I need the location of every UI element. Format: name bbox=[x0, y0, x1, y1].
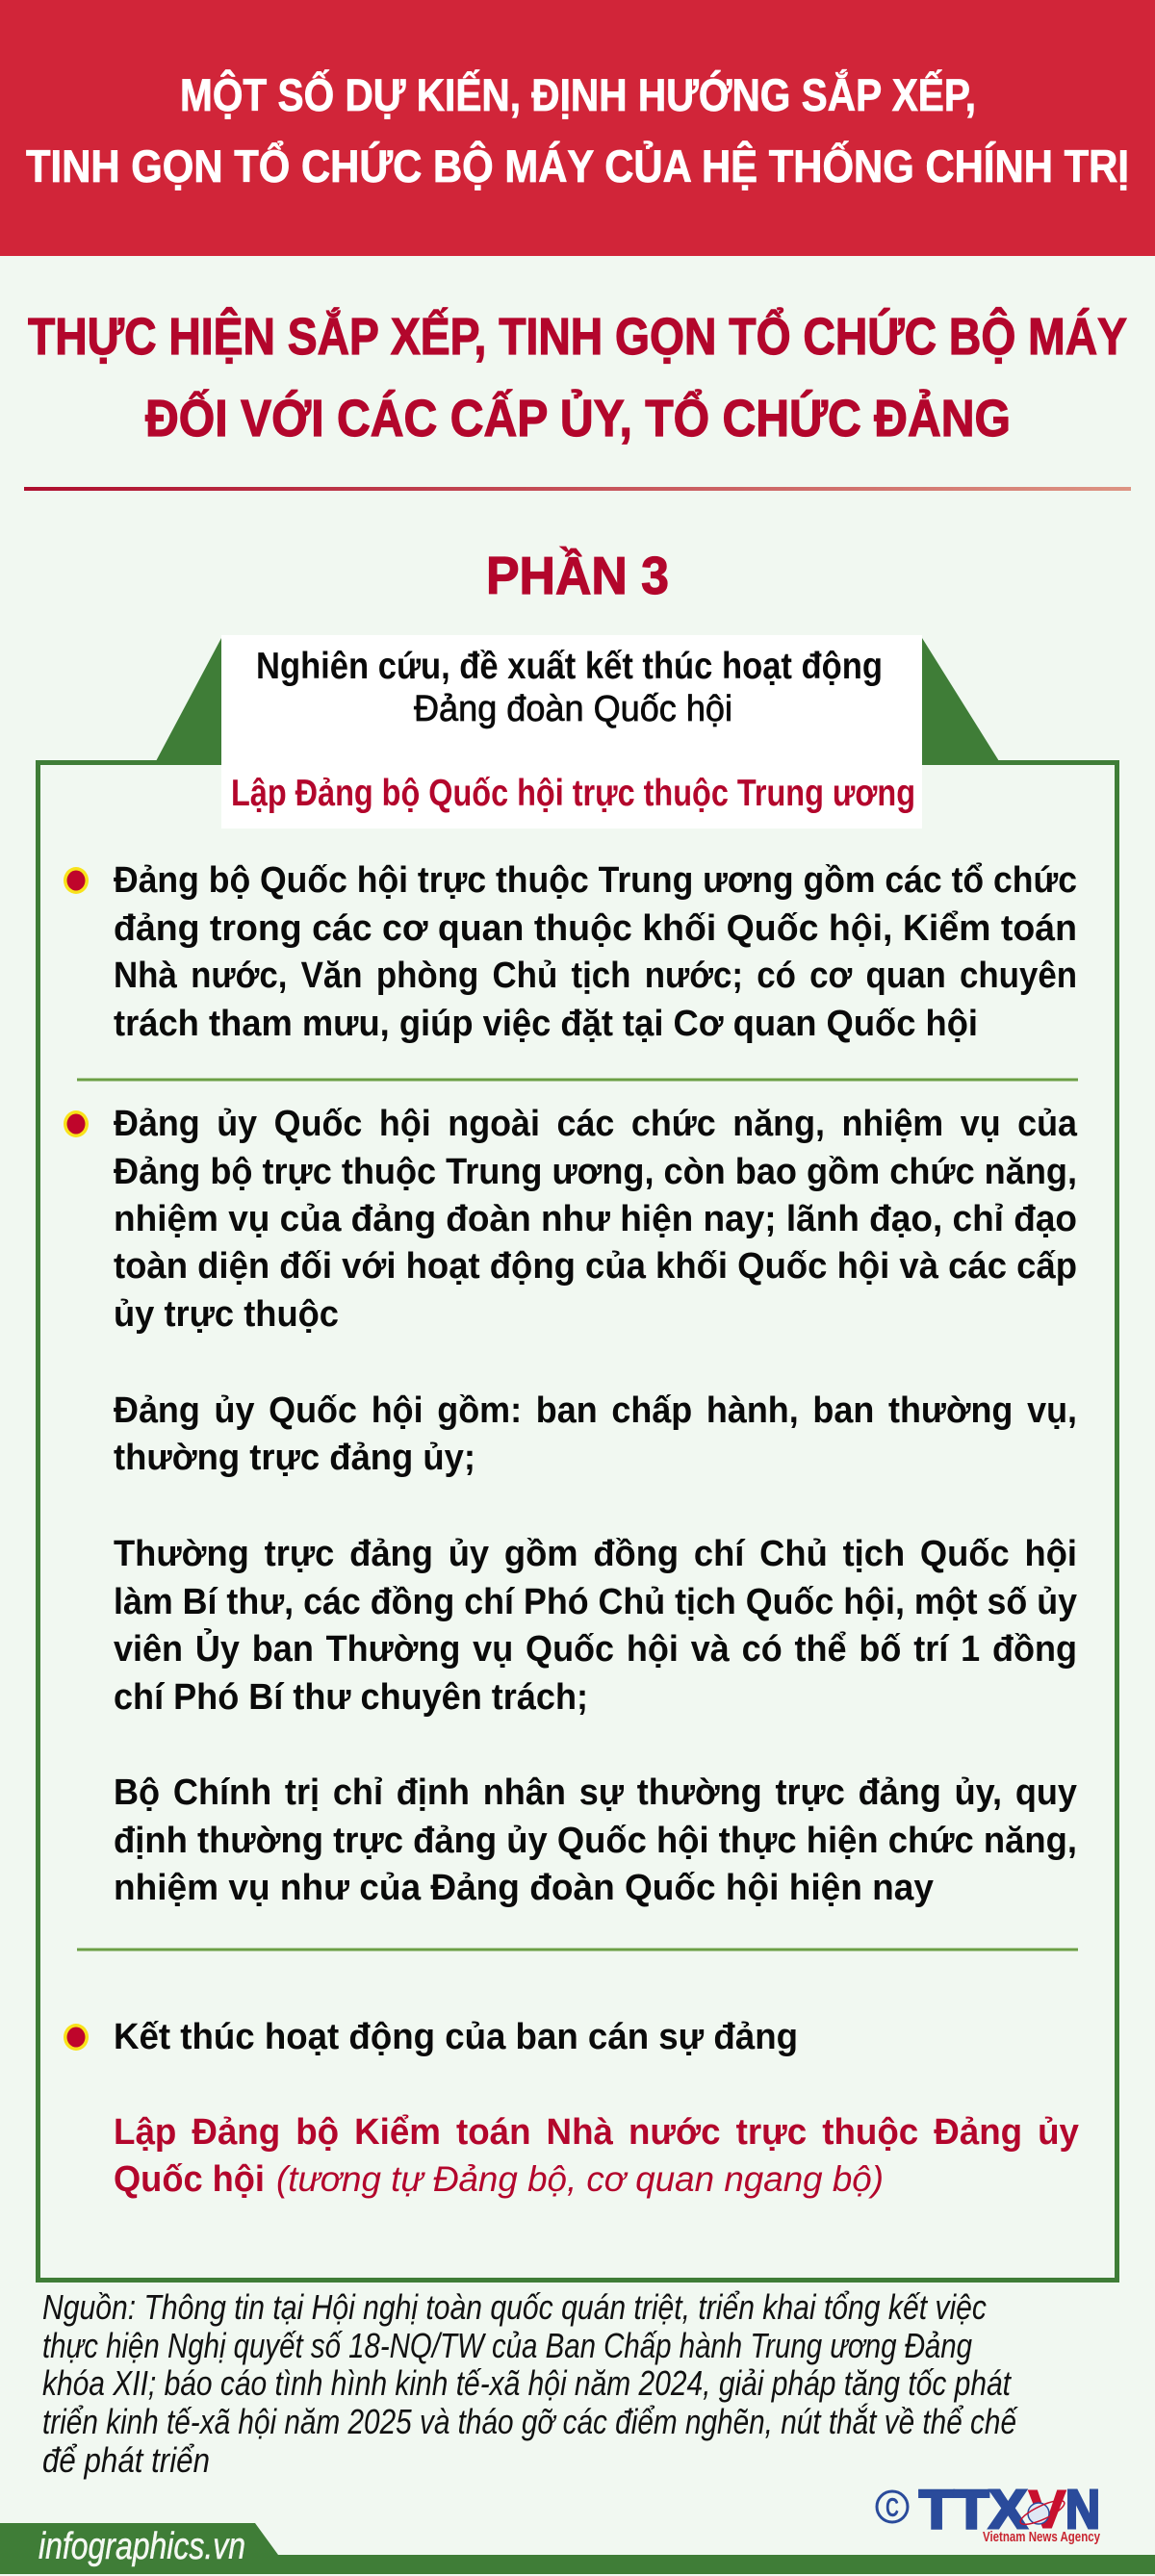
icon: TTXVN logo: C bbox=[886, 2492, 899, 2522]
bullet 3 bbox=[64, 2024, 89, 2051]
right green triangle bbox=[922, 638, 999, 761]
text block: red note bbox=[114, 2112, 1079, 2200]
text block: second item: định thường trực đảng ủy Quốc hội thực hiện chức năng, bbox=[114, 1821, 1077, 1861]
text block: second item: Bộ Chính trị chỉ định nhân sự thường trực đảng ủy, quy bbox=[114, 1773, 1077, 1813]
text block: second item: nhiệm vụ như của Đảng đoàn Quốc hội hiện nay bbox=[114, 1868, 934, 1908]
subtitle heading bbox=[28, 307, 1127, 447]
source note: Nguồn: Thông tin tại Hội nghị toàn quốc quán triệt, triển khai tổng kết việc bbox=[42, 2287, 987, 2327]
text block: second item bbox=[114, 1104, 1078, 1908]
icon: TTXVN logo: N bbox=[1065, 2479, 1100, 2540]
text block: first item bbox=[114, 860, 1077, 1044]
icon: TTXVN logo: Vietnam News Agency bbox=[983, 2529, 1100, 2545]
subtitle heading: ĐỐI VỚI CÁC CẤP ỦY, TỔ CHỨC ĐẢNG bbox=[145, 390, 1011, 447]
text block: first item: đảng trong các cơ quan thuộc khối Quốc hội, Kiểm toán bbox=[114, 908, 1077, 949]
white heading box bbox=[221, 635, 922, 829]
text block: third item: Kết thúc hoạt động của ban cán sự đảng bbox=[114, 2017, 798, 2057]
section label: PHẦN 3 bbox=[486, 546, 669, 605]
header band with title bbox=[0, 0, 1155, 256]
text block: first item: Đảng bộ Quốc hội trực thuộc Trung ương gồm các tổ chức bbox=[114, 860, 1077, 901]
icon: TTXVN logo: V bbox=[1028, 2479, 1066, 2540]
text block: second item: ủy trực thuộc bbox=[114, 1294, 339, 1335]
text block: first item: Nhà nước, Văn phòng Chủ tịch nước; có cơ quan chuyên bbox=[114, 956, 1077, 996]
text block: second item: nhiệm vụ của đảng đoàn như hiện nay; lãnh đạo, chỉ đạo bbox=[114, 1199, 1077, 1239]
bullet 1 bbox=[64, 867, 89, 894]
icon: TTXVN logo bbox=[877, 2479, 1100, 2545]
text block: second item: Đảng ủy Quốc hội ngoài các chức năng, nhiệm vụ của bbox=[114, 1104, 1078, 1144]
bullet 2 bbox=[64, 1110, 89, 1137]
text block: second item: Đảng ủy Quốc hội gồm: ban chấp hành, ban thường vụ, bbox=[114, 1390, 1077, 1431]
white heading box: Đảng đoàn Quốc hội bbox=[414, 689, 732, 729]
source note bbox=[42, 2287, 1018, 2480]
left green triangle bbox=[156, 638, 221, 761]
text block: red note: Lập Đảng bộ Kiểm toán Nhà nước trực thuộc Đảng ủy bbox=[114, 2112, 1079, 2153]
text block: second item: chí Phó Bí thư chuyên trách; bbox=[114, 1677, 588, 1718]
text block: red note: Quốc hội bbox=[114, 2159, 265, 2200]
header band with title: MỘT SỐ DỰ KIẾN, ĐỊNH HƯỚNG SẮP XẾP, bbox=[180, 69, 976, 120]
white heading box: Lập Đảng bộ Quốc hội trực thuộc Trung ương bbox=[231, 773, 915, 814]
footer band with site name: infographics.vn bbox=[38, 2526, 245, 2567]
text block: second item: Thường trực đảng ủy gồm đồng chí Chủ tịch Quốc hội bbox=[114, 1534, 1077, 1574]
text block: second item: toàn diện đối với hoạt động của khối Quốc hội và các cấp bbox=[114, 1246, 1077, 1287]
white heading box: Nghiên cứu, đề xuất kết thúc hoạt động bbox=[256, 646, 883, 687]
text block: second item: viên Ủy ban Thường vụ Quốc hội và có thể bố trí 1 đồng bbox=[114, 1627, 1077, 1670]
text block: second item: Đảng bộ trực thuộc Trung ương, còn bao gồm chức năng, bbox=[114, 1152, 1077, 1192]
panel: main content frame bbox=[38, 635, 1116, 2281]
text block: second item: làm Bí thư, các đồng chí Phó Chủ tịch Quốc hội, một số ủy bbox=[114, 1582, 1077, 1622]
source note: thực hiện Nghị quyết số 18-NQ/TW của Ban Chấp hành Trung ương Đảng bbox=[42, 2326, 972, 2365]
text block: red note: (tương tự Đảng bộ, cơ quan ngang bộ) bbox=[276, 2159, 884, 2199]
text block: first item: trách tham mưu, giúp việc đặt tại Cơ quan Quốc hội bbox=[114, 1004, 978, 1044]
icon: TTXVN logo: TTX bbox=[919, 2479, 1027, 2540]
footer band with site name bbox=[0, 2523, 1155, 2574]
text block: second item: thường trực đảng ủy; bbox=[114, 1438, 475, 1478]
source note: để phát triển bbox=[42, 2440, 210, 2480]
